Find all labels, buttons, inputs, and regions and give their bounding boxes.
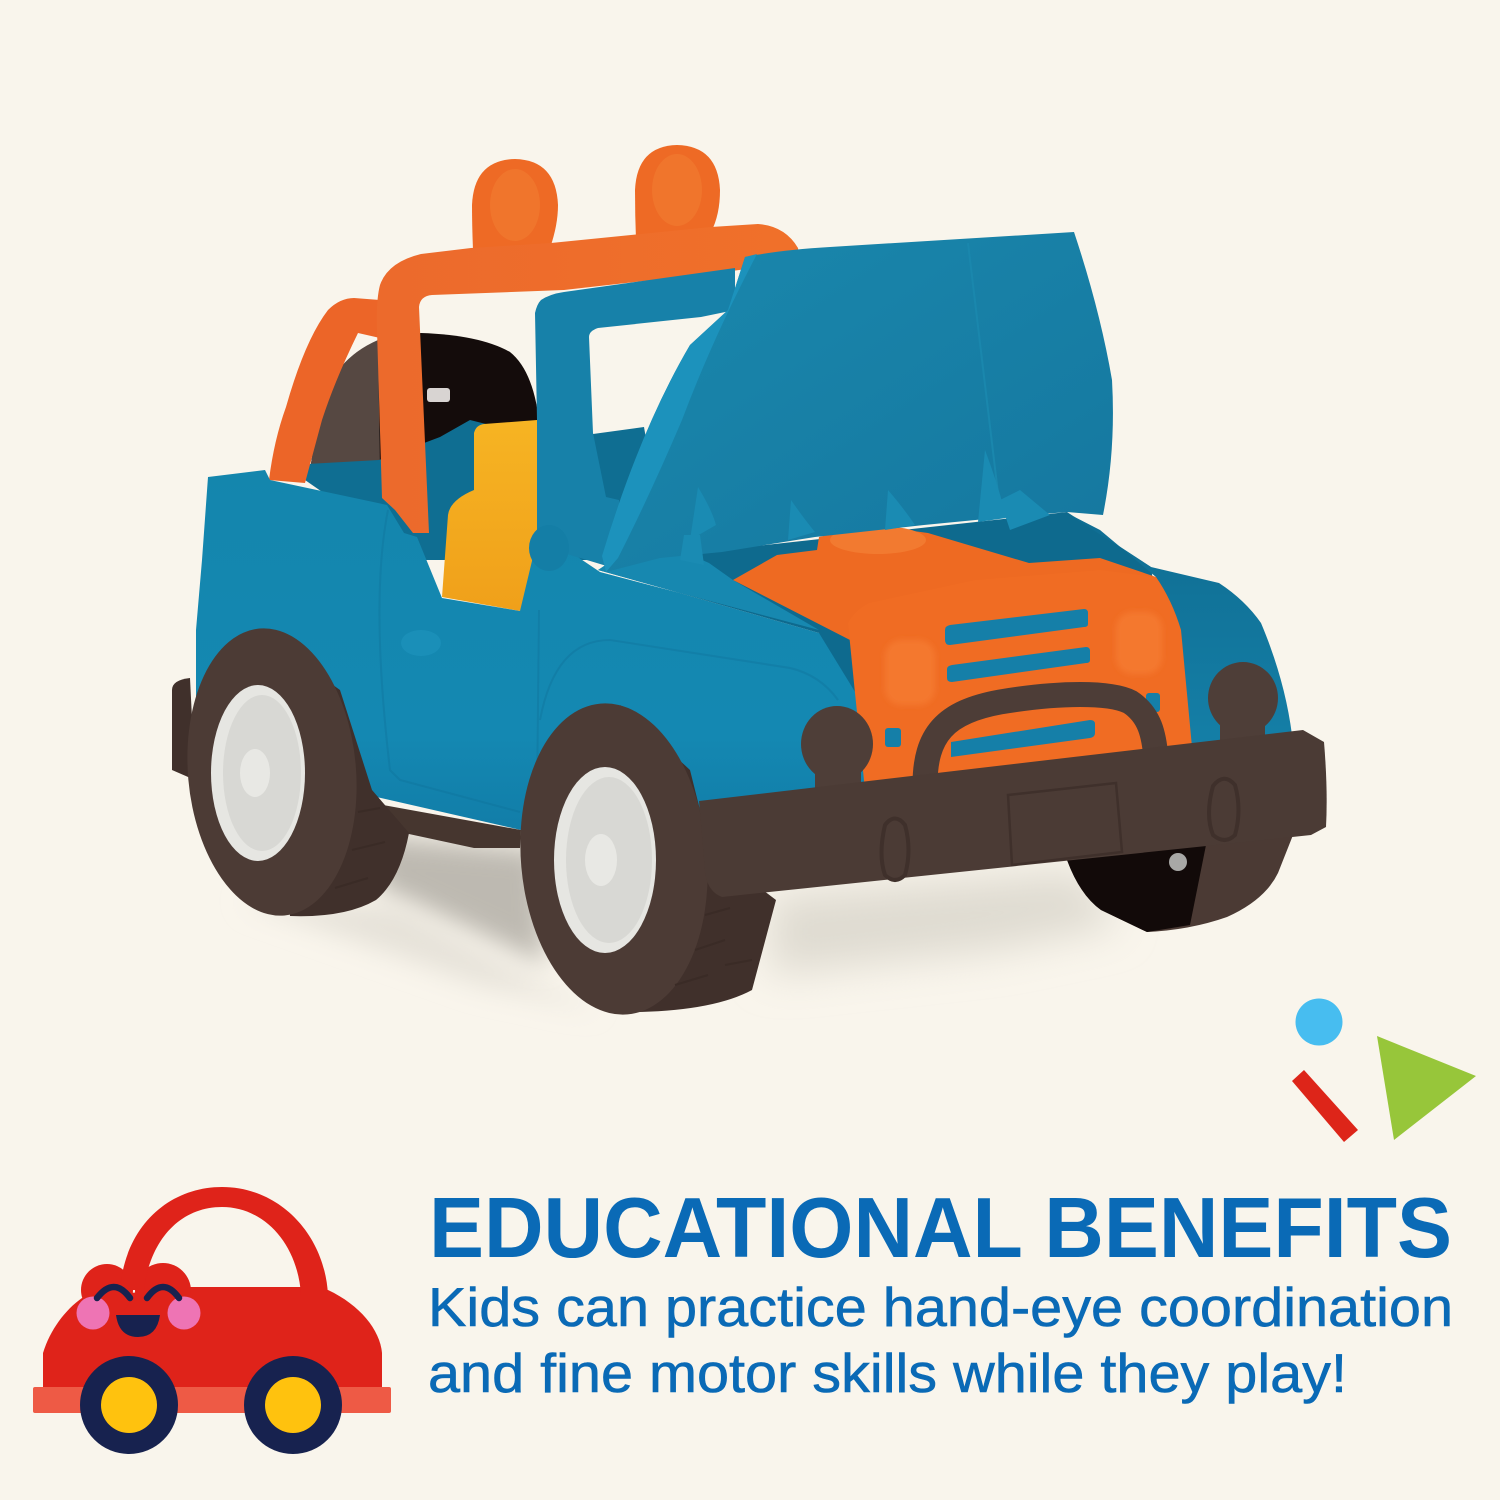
body shading: door seams [379,510,838,812]
body text [428,1276,1453,1404]
roof lights [472,145,720,250]
circle [1296,998,1342,1046]
license plate and hooks [882,779,1238,880]
ground shadow [240,835,1120,1010]
door handle [401,630,441,656]
roll bar front hoop [377,224,800,533]
grille lamps [885,612,1162,705]
windshield frame [535,268,735,570]
interior back [305,420,660,560]
grille slats [885,609,1160,757]
roll bar rear hoop [269,298,380,483]
product photo: toy jeep [172,145,1327,1023]
wheels [80,1356,178,1454]
tread notches [335,808,385,888]
cheeks [76,1296,110,1330]
engine detail [830,526,926,554]
front right wheel [1067,830,1295,932]
triangle [1377,1036,1476,1140]
tread notches [675,908,752,985]
front wheel [508,695,776,1023]
front fender right [1065,512,1292,760]
jeep body [196,470,870,850]
rear wheel [172,621,409,923]
open hood [602,232,1113,572]
sill [33,1387,391,1413]
body text: and fine motor skills while they play! [428,1342,1347,1404]
hood fold [968,243,1000,510]
bumper [699,730,1327,897]
eyes [97,1287,179,1298]
hood bumps [81,1263,191,1319]
hood fins [680,450,1050,565]
front hub [554,767,656,953]
body text: Kids can practice hand-eye coordination [428,1276,1453,1338]
seat [442,420,545,611]
side step [372,803,521,848]
cowl panel [598,550,819,630]
bumper knobs [801,662,1278,801]
heading: EDUCATIONAL BENEFITS [429,1181,1452,1276]
red bar [1292,1070,1358,1142]
decorative shapes [1292,998,1476,1142]
bull bar [925,694,1156,785]
icon: smiling red car [33,1187,391,1454]
mouth [116,1315,160,1337]
ball hinge [529,525,569,571]
roof [120,1187,328,1295]
rear hub [211,685,305,861]
spare wheel [310,333,540,470]
grille panel [848,570,1192,790]
hood lighter edge [602,254,757,572]
under-hood dark area and cowl [598,512,1170,700]
engine [733,525,1170,640]
car body [43,1287,382,1387]
